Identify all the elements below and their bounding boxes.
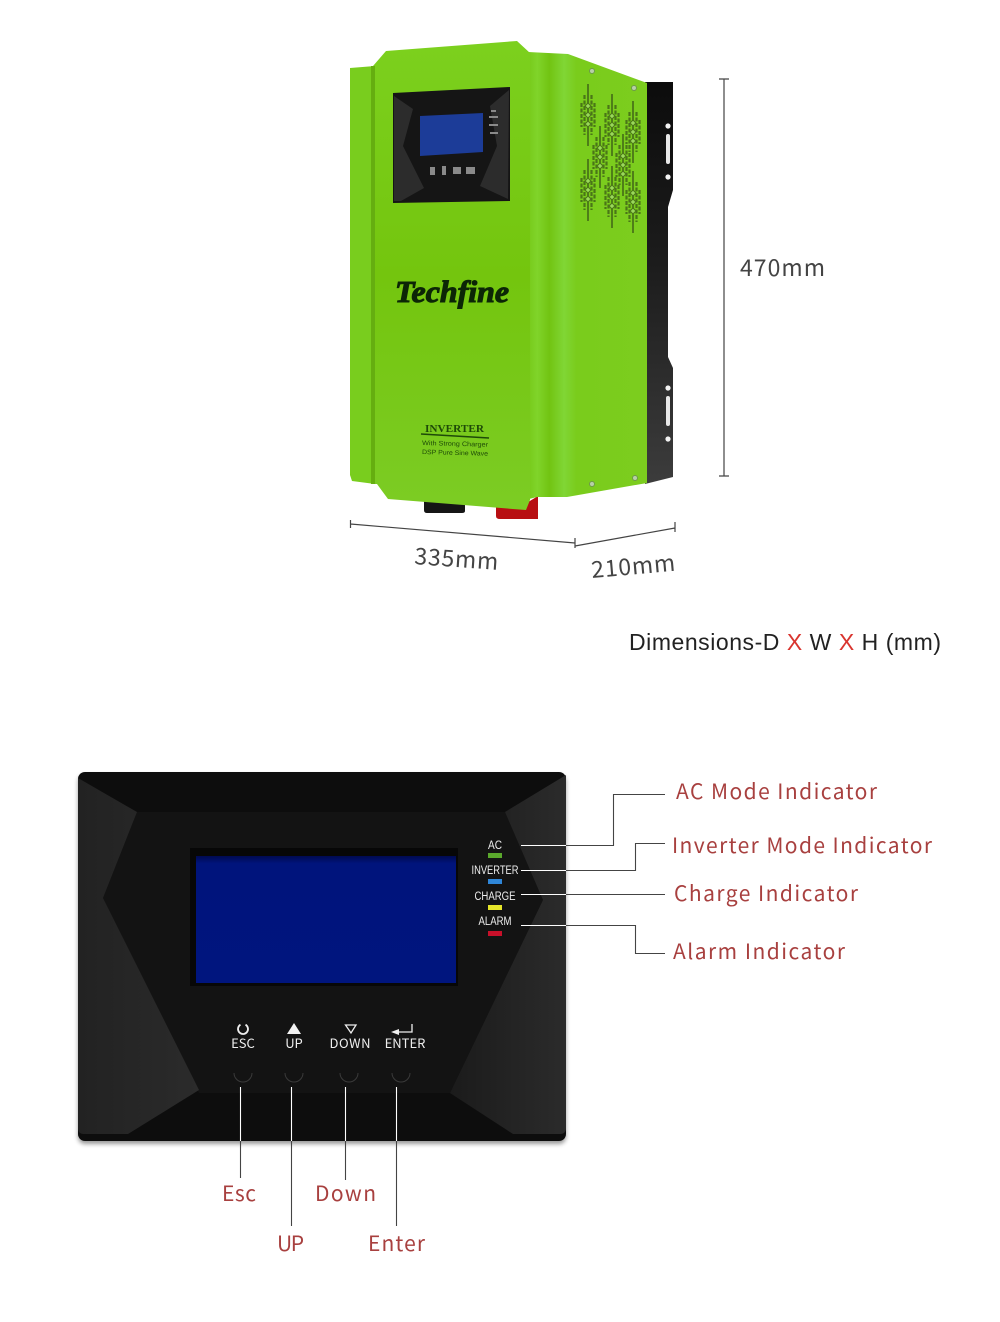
indicator: inverter: INVERTER xyxy=(472,865,518,877)
button: DOWN: DOWN xyxy=(330,1033,370,1052)
indicator: alarm: ALARM xyxy=(478,916,512,928)
product label: inverter: With Strong Charger xyxy=(422,440,489,449)
product label: inverter: DSP Pure Sine Wave xyxy=(422,449,489,458)
product label: inverter xyxy=(421,423,489,458)
label: Down: Down xyxy=(315,1178,376,1208)
label: Inverter Mode Indicator: Inverter Mode Indicator xyxy=(672,830,933,860)
button: ENTER: ENTER xyxy=(385,1033,425,1052)
right facet xyxy=(450,775,566,1134)
product label: inverter: INVERTER xyxy=(425,423,485,435)
leader: enter xyxy=(396,1087,398,1226)
button: UP xyxy=(285,1023,303,1082)
dimension: depth 335mm: 335mm xyxy=(414,537,500,577)
leader: alarm xyxy=(521,926,665,954)
panel body xyxy=(78,772,566,1141)
dimension: depth 335mm xyxy=(350,520,575,577)
dimension: width 210mm: 210mm xyxy=(590,544,676,585)
enclosure: green side xyxy=(525,52,647,500)
caption: dimensions: Dimensions-D X W X H (mm) xyxy=(629,629,941,655)
label: Enter: Enter xyxy=(368,1228,426,1258)
leader: inverter mode xyxy=(521,844,665,870)
leader: charge xyxy=(521,894,665,896)
indicator: inverter xyxy=(472,865,518,884)
logo: Techfine: Techfine xyxy=(395,274,509,309)
bracket: black mounting plate xyxy=(645,82,673,484)
leader: up xyxy=(290,1087,292,1226)
left facet xyxy=(78,778,199,1134)
label: UP: UP xyxy=(277,1228,304,1258)
small control panel xyxy=(393,87,510,203)
lcd screen xyxy=(190,848,458,986)
button: ESC xyxy=(231,1022,255,1082)
label: Alarm Indicator: Alarm Indicator xyxy=(673,936,846,966)
indicator: charge xyxy=(474,891,516,910)
button: UP: UP xyxy=(285,1033,303,1052)
panel: control panel front xyxy=(78,772,566,1141)
indicator: alarm xyxy=(478,916,512,936)
illustration: inverter product xyxy=(350,41,673,519)
leader: AC mode xyxy=(521,794,665,846)
indicator: AC xyxy=(488,840,502,858)
enclosure: green front xyxy=(373,41,530,510)
button: DOWN xyxy=(330,1025,370,1082)
label: AC Mode Indicator: AC Mode Indicator xyxy=(676,776,878,806)
screws xyxy=(590,68,638,486)
vents xyxy=(582,84,640,233)
indicator: charge: CHARGE xyxy=(474,891,516,903)
leader: down xyxy=(344,1087,346,1180)
button: ENTER xyxy=(385,1024,425,1082)
dimension: width 210mm xyxy=(575,522,676,585)
label: Esc: Esc xyxy=(222,1178,256,1208)
terminal: black xyxy=(424,501,465,513)
label: Charge Indicator: Charge Indicator xyxy=(674,878,859,908)
enclosure: left flange xyxy=(350,66,375,484)
center face xyxy=(103,812,543,1093)
button: ESC: ESC xyxy=(231,1033,255,1052)
leader: esc xyxy=(240,1087,242,1178)
dimension: height 470mm xyxy=(719,79,825,476)
dimension: height 470mm: 470mm xyxy=(740,249,825,283)
terminal: red xyxy=(496,496,538,519)
indicator: AC: AC xyxy=(488,840,502,852)
